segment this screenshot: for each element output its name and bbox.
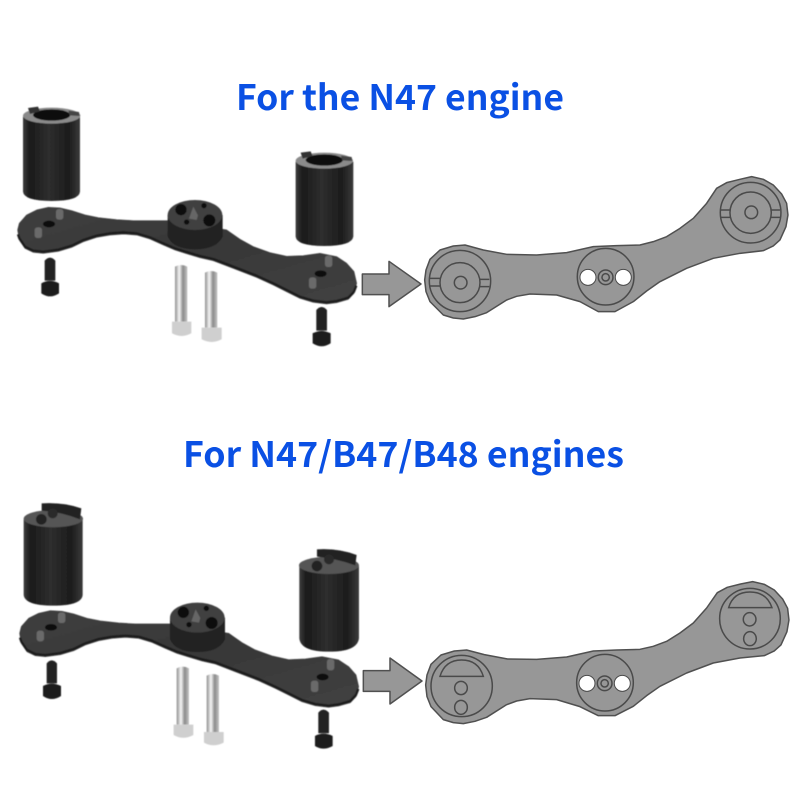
right bore — [720, 588, 780, 649]
bolt: black left — [41, 258, 59, 296]
hub — [168, 200, 223, 249]
bolt: black right — [315, 710, 333, 749]
bolt: silver right — [202, 271, 222, 342]
bolt: silver left — [174, 667, 193, 738]
schematic: N47 plate — [425, 177, 788, 319]
bolt: silver right — [204, 674, 224, 745]
left bore — [429, 250, 491, 312]
sleeve: right — [299, 549, 359, 652]
left bore — [431, 655, 492, 717]
arrow: bottom — [363, 658, 422, 704]
arrow: top — [362, 261, 421, 307]
right bore — [720, 182, 781, 243]
sleeve: left — [23, 107, 80, 201]
centre bore — [577, 248, 634, 305]
bolt: black right — [313, 307, 331, 346]
sleeve: left — [24, 503, 83, 606]
bolt: silver left — [172, 265, 191, 336]
title: N47 engine: For the N47 engine — [236, 70, 564, 121]
sleeve: right — [296, 151, 353, 246]
photo: N47 tool kit — [18, 107, 357, 346]
hub — [170, 603, 225, 652]
centre bore — [577, 654, 633, 711]
plate — [20, 611, 359, 707]
plate — [18, 207, 357, 304]
bolt: black left — [43, 660, 61, 699]
photo: N47/B47/B48 tool kit — [20, 503, 359, 749]
schematic: N47/B47/B48 plate — [426, 582, 789, 724]
title: N47/B47/B48 engines: For N47/B47/B48 engines — [183, 427, 624, 478]
